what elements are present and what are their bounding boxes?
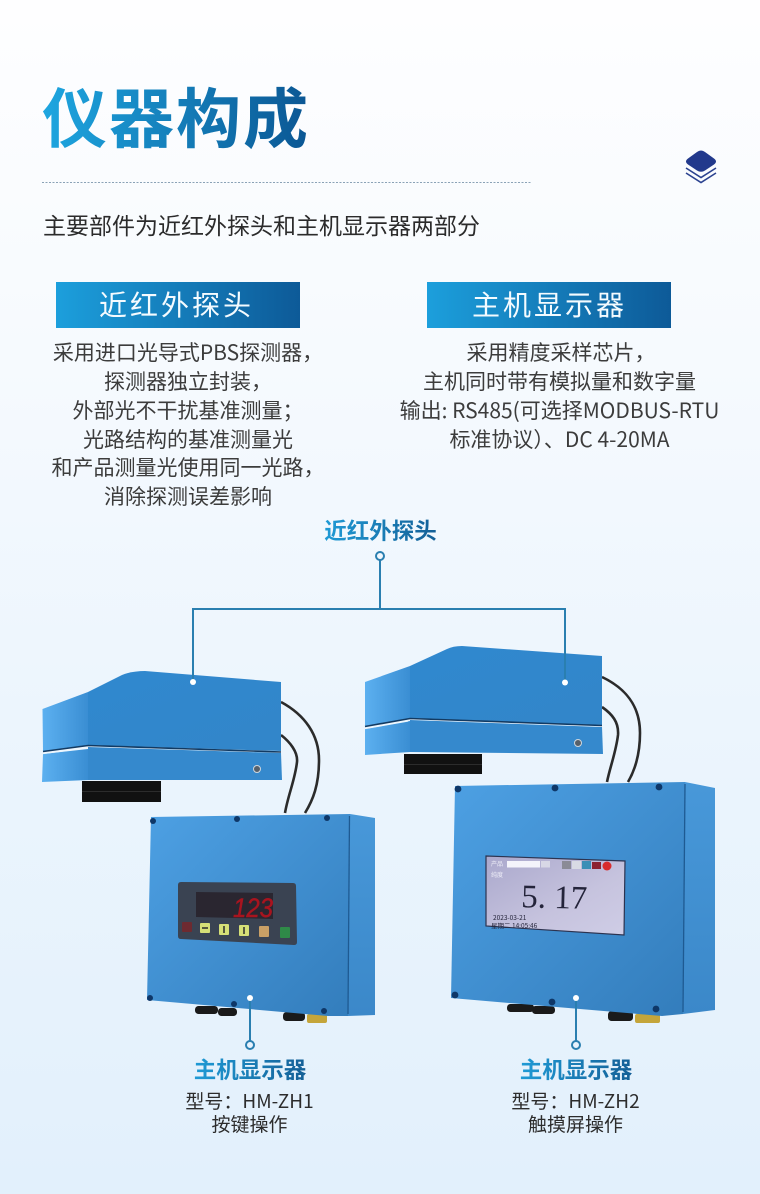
title: 仪器构成 [42,67,308,161]
marker: right probe dot [562,680,568,686]
text block: probe features: 光路结构的基准测量光 [83,424,293,454]
text block: host features: 标准协议）、DC 4-20MA [449,424,670,454]
touch screen: 2023-03-21 [493,912,527,922]
text block: probe features: 采用进口光导式PBS探测器， [53,337,323,367]
label: left host: 型号：HM-ZH1 [185,1087,314,1114]
label: right host: 主机显示器 [520,1053,633,1085]
label: left host [185,1053,314,1137]
heading: probe banner: 近红外探头 [99,284,254,324]
panel: host description [400,282,719,454]
mount foot [404,754,482,774]
heading: probe banner [56,282,300,328]
heading: host banner: 主机显示器 [472,284,627,324]
touch screen: 纯度 [491,870,503,879]
mount foot [82,781,161,802]
label: right host: 触摸屏操作 [528,1110,623,1137]
readout: 123 [233,893,273,923]
screw [254,766,260,772]
screws [452,784,662,1012]
keypad [182,922,290,938]
text block: probe features: 探测器独立封装， [104,366,272,396]
label: probe: 近红外探头 [324,514,437,546]
device: right host box HM-ZH2 [451,782,715,1023]
label: left host: 主机显示器 [194,1053,307,1085]
screw [574,740,582,746]
text block: host features: 采用精度采样芯片， [466,337,656,367]
cables [281,702,319,813]
touch screen: 产品 [491,859,503,868]
device: left probe [42,671,319,813]
text block: host features [400,337,719,454]
subtitle: 主要部件为近红外探头和主机显示器两部分 [43,207,480,241]
label: right host [511,1053,640,1137]
device: right probe [365,646,640,782]
connector: probe callout lines [193,552,565,682]
label: right host: 型号：HM-ZH2 [511,1087,640,1114]
connector: left host callout [246,995,254,1049]
text block: probe features: 和产品测量光使用同一光路， [52,452,324,482]
device: left host box HM-ZH1 [147,814,375,1023]
reading: 5. 17 [521,879,588,917]
text block: host features: 输出: RS485(可选择MODBUS-RTU [400,395,719,425]
screws [147,815,330,1014]
cables [602,677,640,782]
connectors [507,1004,660,1023]
connectors [195,1006,327,1023]
marker: left probe dot [190,679,196,685]
text block: host features: 主机同时带有模拟量和数字量 [423,366,696,396]
text block: probe features [52,337,324,511]
text block: probe features: 外部光不干扰基准测量； [72,395,304,425]
heading: host banner [427,282,671,328]
touch screen [486,856,625,935]
icon: stacked layers [686,150,716,182]
connector: right host callout [572,995,580,1049]
display panel [178,882,297,945]
label: left host: 按键操作 [211,1110,288,1137]
touch screen: 星期二 14:05:46 [491,920,538,930]
text block: probe features: 消除探测误差影响 [104,481,272,511]
panel: probe description [52,282,324,511]
